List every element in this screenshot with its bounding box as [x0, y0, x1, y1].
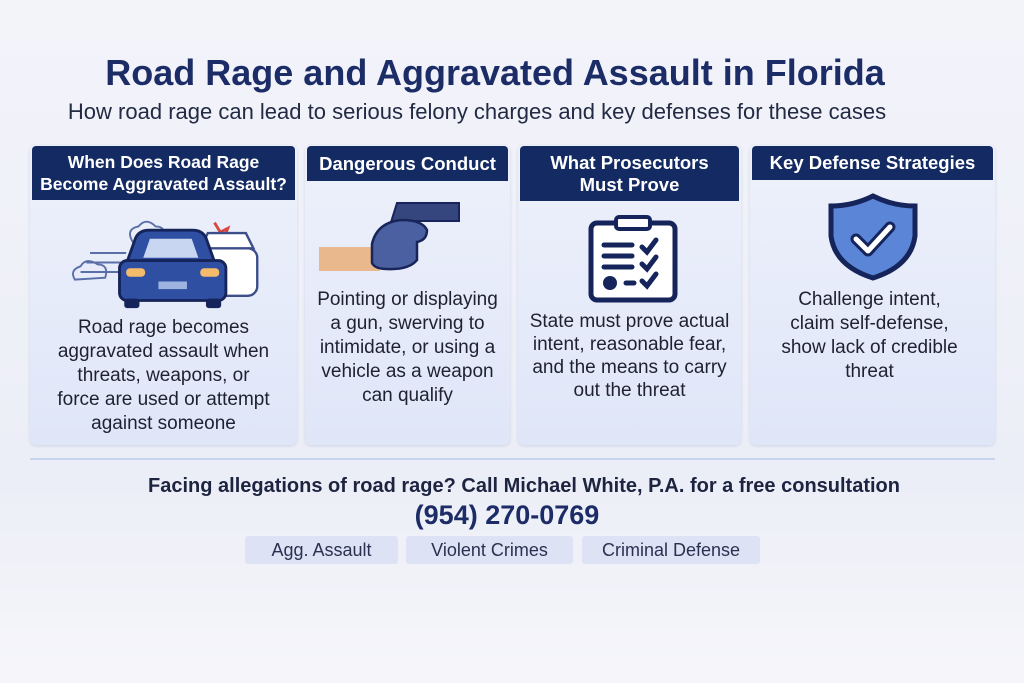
title: Road Rage and Aggravated Assault in Florida: [105, 52, 885, 93]
text: can qualify: [362, 385, 453, 406]
panel: prosecutors: What Prosecutors: [550, 152, 709, 172]
icon: cars: [72, 220, 258, 308]
text: [781, 289, 958, 382]
text: force are used or attempt: [57, 389, 270, 410]
icon: gun: [319, 202, 460, 271]
text: claim self-defense,: [790, 313, 949, 334]
text: Challenge intent,: [798, 289, 941, 310]
panel: road rage: Become Aggravated Assault?: [40, 174, 287, 194]
subtitle: How road rage can lead to serious felony charges and key defenses for these cases: [68, 99, 886, 124]
panel: road rage: [30, 145, 297, 445]
panel: prosecutors: [518, 145, 741, 445]
icon: shield: [828, 193, 918, 281]
panel: dangerous conduct: Dangerous Conduct: [319, 152, 496, 174]
tags: Violent Crimes: [431, 540, 548, 560]
text: out the threat: [574, 380, 685, 401]
call to action: Facing allegations of road rage? Call Michael White, P.A. for a free consultation: [148, 475, 900, 497]
text: show lack of credible: [781, 337, 958, 358]
text: aggravated assault when: [58, 341, 269, 362]
text: State must prove actual: [530, 311, 729, 332]
text: [317, 289, 498, 406]
panel: dangerous conduct: [305, 145, 510, 445]
panel: defense: [750, 145, 995, 445]
text: intent, reasonable fear,: [533, 334, 726, 355]
icon: clipboard: [588, 215, 678, 302]
tags: Criminal Defense: [602, 540, 740, 560]
text: threats, weapons, or: [77, 365, 250, 386]
text: [530, 311, 729, 401]
panel: defense: Key Defense Strategies: [770, 152, 975, 173]
text: vehicle as a weapon: [321, 361, 494, 382]
phone: (954) 270-0769: [415, 500, 599, 530]
text: a gun, swerving to: [330, 313, 485, 334]
text: threat: [845, 361, 894, 382]
text: intimidate, or using a: [320, 337, 495, 358]
panel: prosecutors: Must Prove: [580, 174, 679, 194]
text: Road rage becomes: [78, 317, 249, 338]
text: and the means to carry: [532, 357, 727, 378]
text: [57, 317, 270, 434]
tags: Agg. Assault: [271, 540, 372, 560]
text: against someone: [91, 413, 236, 434]
panel: road rage: When Does Road Rage: [68, 152, 259, 172]
text: Pointing or displaying: [317, 289, 498, 310]
